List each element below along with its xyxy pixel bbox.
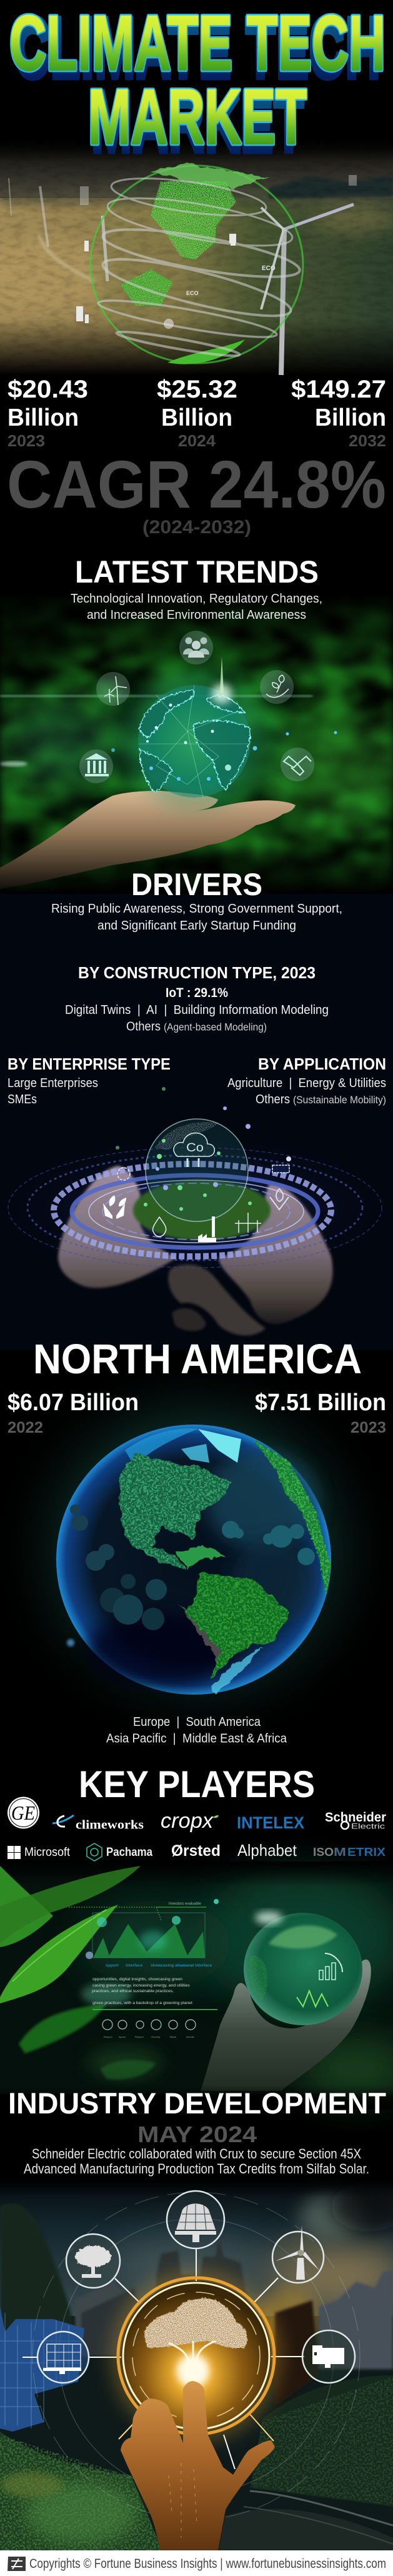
logo: climeworks <box>52 1815 144 1832</box>
panel: north america earth <box>0 1350 393 1750</box>
icon: CO2 cloud: Co <box>186 1141 204 1155</box>
wire globe <box>116 1087 252 1221</box>
footer <box>0 2550 393 2576</box>
eco icons: ECO <box>186 290 199 296</box>
panel: green data and crystal globe photo <box>0 1862 393 2110</box>
segment list: Digital Twins | AI | Building Information Modeling <box>65 1003 329 1017</box>
logo: Isometrix <box>313 1846 386 1858</box>
description: Technological Innovation, Regulatory Changes, <box>71 592 322 606</box>
key player logos <box>7 1797 386 1861</box>
stat 2032: $149.27 <box>291 376 386 403</box>
latest trends heading <box>71 554 322 622</box>
title: Climate Tech Market <box>9 0 386 169</box>
heading: DRIVERS <box>131 867 262 902</box>
chart on holographic display: interface <box>126 1963 142 1968</box>
regional stat 2023 <box>255 1390 386 1436</box>
logo: Isometrix: ISO <box>313 1846 334 1858</box>
icon: folder device <box>302 2330 355 2383</box>
drivers section <box>51 867 342 933</box>
chart on holographic display: showcasing ahumanal interface <box>151 1963 212 1968</box>
stat 2023 <box>7 376 88 450</box>
chart on holographic display: Aerosit <box>186 2035 194 2038</box>
chart on holographic display: green practices, with a backdrop of a greening planet <box>92 2001 192 2005</box>
title line 2 extrusion <box>91 75 304 169</box>
icon: factory <box>198 1216 216 1242</box>
logo: Microsoft: Microsoft <box>24 1846 71 1859</box>
description: and Increased Environmental Awareness <box>87 608 306 622</box>
logo: Alphabet: Alphabet <box>237 1841 297 1860</box>
date: MAY 2024 <box>137 2122 257 2147</box>
heading: BY CONSTRUCTION TYPE, 2023 <box>78 963 316 982</box>
green earth plate <box>133 1180 271 1240</box>
continent: south america <box>178 1573 289 1694</box>
forest foreground <box>0 2375 393 2550</box>
icon: handshake <box>281 748 314 781</box>
logo: cropx: cropx <box>161 1809 214 1833</box>
regional stat 2022: $6.07 Billion <box>7 1390 139 1416</box>
segmentation: by construction type <box>65 963 329 1034</box>
cupped hands <box>58 1166 332 1335</box>
stat 2024: Billion <box>161 404 232 431</box>
heading: BY APPLICATION <box>258 1055 386 1073</box>
icon: wind turbine <box>272 2225 324 2283</box>
stat 2023: $20.43 <box>7 376 88 403</box>
stat 2024: $25.32 <box>157 376 237 403</box>
chart on holographic display: Bilath <box>170 2035 176 2038</box>
logo: Orsted: Ørsted <box>171 1842 221 1860</box>
icon: wind turbines <box>96 672 130 706</box>
chart on holographic display: Respon <box>135 2035 144 2038</box>
icon: wind farm <box>235 1213 261 1233</box>
hand touching dial <box>121 2381 275 2550</box>
panel: latest trends photo <box>0 594 393 894</box>
chart on holographic display: practices, and ethical sustainable practices, <box>92 1989 174 1993</box>
regional stat 2023: 2023 <box>351 1419 386 1436</box>
chart on holographic display: Security <box>151 2035 160 2038</box>
logo: Schneider Electric: Schneider <box>325 1810 386 1825</box>
description <box>71 592 322 622</box>
segment 1: Large Enterprises <box>7 1076 98 1090</box>
glowing rings <box>8 1148 382 1268</box>
others line <box>126 1020 267 1034</box>
regional stat 2022: 2022 <box>7 1419 43 1436</box>
description <box>51 902 342 933</box>
icon: tree <box>66 2234 120 2288</box>
stat 2024 <box>157 376 237 450</box>
stat 2032 <box>291 376 386 450</box>
center glowing dial <box>110 2270 282 2442</box>
clouds <box>70 1505 315 1630</box>
others line: (Agent-based Modeling) <box>164 1021 267 1033</box>
turbines in the field <box>9 178 354 375</box>
logo: GE <box>7 1797 39 1829</box>
stat 2023: 2023 <box>7 431 45 450</box>
icon: hands with leaf <box>103 1195 126 1219</box>
other regions list: Europe | South America <box>133 1715 261 1729</box>
logo: Schneider Electric <box>325 1810 386 1830</box>
icon: CO2 cloud <box>174 1133 214 1167</box>
description: Rising Public Awareness, Strong Government Support, <box>51 902 342 916</box>
connector lines <box>22 2248 304 2469</box>
icon: people <box>179 631 213 664</box>
icon: plant in hand <box>260 670 294 704</box>
CAGR period: (2024-2032) <box>142 517 251 538</box>
earth globe <box>56 1425 331 1695</box>
icon: flame in hands <box>270 1189 289 1210</box>
eco icons <box>76 175 357 329</box>
chart on holographic display: opportunities, digital insights, showcasing green <box>92 1977 182 1982</box>
leaves <box>0 1866 156 2080</box>
hand holding crystal globe <box>201 1960 371 2091</box>
logo: Pachama: Pachama <box>106 1846 152 1859</box>
icon: water drop plug <box>152 1217 166 1236</box>
logo: Fortune Business Insights <box>7 2557 26 2571</box>
industry development section <box>8 2087 386 2177</box>
logo: Isometrix: M <box>334 1846 346 1858</box>
stat 2024: 2024 <box>178 431 216 450</box>
solar panel array <box>0 2307 84 2432</box>
others line: (Sustainable Mobility) <box>293 1094 386 1106</box>
icon: solar panel <box>272 1156 291 1173</box>
others line: Others <box>256 1093 290 1106</box>
panel: hands with climate hologram <box>0 894 393 1350</box>
heading: North America: NORTH AMERICA <box>33 1336 362 1383</box>
chart on holographic display <box>69 1899 219 2038</box>
stat 2023: Billion <box>7 404 79 431</box>
description <box>24 2146 369 2177</box>
mountain <box>0 2203 75 2375</box>
eco icons: ECO <box>262 265 276 272</box>
city silhouettes <box>75 2238 393 2407</box>
icon: solar dome <box>167 2191 224 2248</box>
segment 2: SMEs <box>7 1093 37 1106</box>
lens flare <box>0 695 312 697</box>
stat 2032: 2032 <box>349 431 386 450</box>
heading: BY ENTERPRISE TYPE <box>7 1055 171 1073</box>
segmentation: by application <box>227 1055 386 1106</box>
logo: Schneider Electric: Electric <box>351 1822 385 1830</box>
logo: Pachama <box>87 1843 152 1861</box>
holographic earth <box>0 656 337 809</box>
description: and Significant Early Startup Funding <box>97 919 296 933</box>
heading: Key Players: KEY PLAYERS <box>79 1763 315 1805</box>
leading segment: IoT : 29.1% <box>166 986 228 1000</box>
heading: INDUSTRY DEVELOPMENT <box>8 2087 386 2120</box>
central tree <box>144 2298 247 2369</box>
logo: Intelex: INTELEX <box>237 1813 304 1832</box>
market size statistics <box>7 376 386 538</box>
chart on holographic display: Investors evaluable <box>169 1902 201 1906</box>
chart on holographic display: opport <box>106 1963 119 1968</box>
others line <box>256 1093 386 1106</box>
hand holding globe <box>0 791 296 889</box>
other regions list: Asia Pacific | Middle East & Africa <box>106 1732 287 1745</box>
other regions list <box>106 1715 287 1745</box>
regional stat 2023: $7.51 Billion <box>255 1390 386 1416</box>
regional stat 2022 <box>7 1390 139 1436</box>
chart on holographic display: Respon <box>104 2035 112 2038</box>
logo: GE: GE <box>11 1802 35 1824</box>
continent: eastern edge <box>254 1440 331 1595</box>
logo: Isometrix: ETRIX <box>347 1846 386 1858</box>
technology arcs <box>32 2192 360 2520</box>
hero photo: wind farm and holographic globe <box>0 139 393 375</box>
logo: climeworks: climeworks <box>76 1818 144 1832</box>
icon: recycling gear <box>117 1168 130 1180</box>
continent: north america <box>118 1453 231 1570</box>
heading: LATEST TRENDS <box>75 554 319 589</box>
chart on holographic display: casing green energy, increasing energy, and utilities <box>92 1983 190 1988</box>
panel: sustainable city with touch interface <box>0 2178 393 2550</box>
crystal globe <box>244 1912 362 2025</box>
holographic globe <box>91 164 303 364</box>
icon: government building <box>79 749 113 783</box>
icon: laptop solar <box>37 2332 89 2383</box>
chart on holographic display: Ayoon <box>119 2035 126 2038</box>
others line: Others <box>126 1020 161 1034</box>
stat 2032: Billion <box>315 404 386 431</box>
segmentation: by enterprise type <box>7 1055 171 1106</box>
